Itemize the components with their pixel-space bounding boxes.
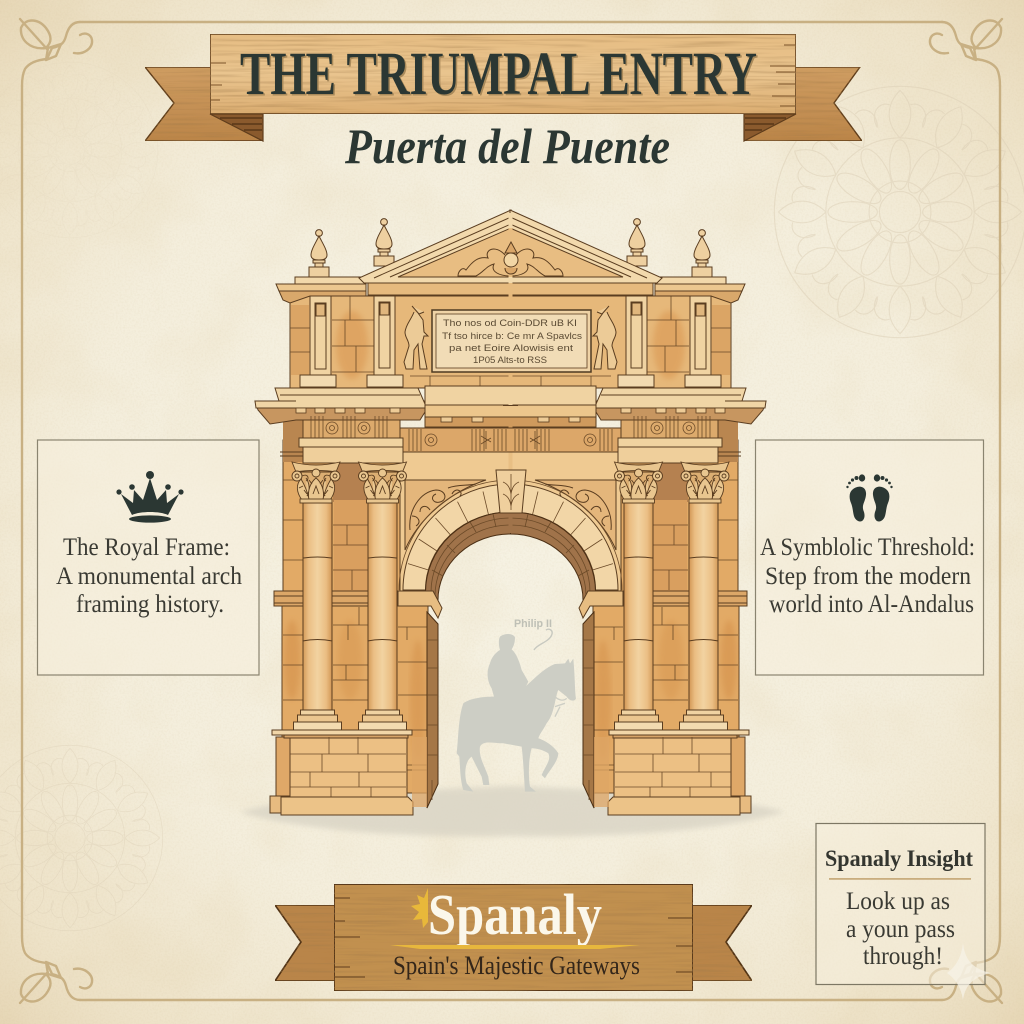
column two bbox=[358, 503, 406, 730]
finial inner bbox=[374, 219, 394, 266]
panel: symbolic threshold bbox=[756, 440, 984, 675]
icon: crown bbox=[116, 471, 184, 523]
insight text: a youn pass bbox=[846, 916, 955, 943]
text block: world into Al-Andalus bbox=[769, 591, 974, 618]
title shadow: THE TRIUMPAL ENTRY bbox=[242, 42, 758, 110]
attic wall bbox=[290, 296, 511, 388]
insight text: through! bbox=[863, 943, 943, 970]
voussoir ring bbox=[403, 484, 510, 590]
icon: sun bbox=[411, 888, 428, 928]
capital one bbox=[292, 462, 340, 503]
name label: Philip II bbox=[514, 618, 552, 630]
left ribbon tail bbox=[145, 67, 263, 141]
watermark: mandala bottom left bbox=[0, 745, 163, 931]
watermark: mandala top left bbox=[0, 62, 158, 238]
mid band bbox=[274, 591, 404, 606]
title text: THE TRIUMPAL ENTRY bbox=[240, 41, 757, 108]
pediment rosette bbox=[504, 242, 518, 274]
capital two bbox=[358, 462, 406, 503]
wooden plank bbox=[334, 884, 693, 991]
insight divider bbox=[829, 878, 971, 880]
panel: spanaly insight bbox=[816, 824, 985, 984]
text block: framing history. bbox=[76, 591, 224, 618]
finial outer bbox=[309, 230, 329, 277]
ground shadow bbox=[240, 786, 785, 836]
triglyph row bbox=[311, 416, 387, 438]
upper left entablature bbox=[255, 388, 425, 463]
wooden plank bbox=[210, 34, 796, 114]
spandrel bbox=[400, 452, 511, 592]
pediment bbox=[359, 210, 511, 283]
plank cracks bbox=[211, 45, 795, 106]
inscription text: Tho nos od Coin-DDR uB KI bbox=[443, 318, 577, 329]
insight text: Look up as bbox=[846, 888, 950, 915]
inscription text: 1P05 Alts-to RSS bbox=[473, 355, 547, 366]
text block: A monumental arch bbox=[56, 563, 242, 590]
rider silhouette: Philip II bbox=[457, 618, 576, 792]
left half of arch bbox=[255, 210, 511, 815]
lower wall bbox=[283, 440, 403, 592]
pier reveal bbox=[427, 612, 438, 808]
text block bbox=[760, 534, 975, 618]
right ribbon tail bbox=[744, 67, 862, 141]
title banner bbox=[145, 34, 862, 141]
text block bbox=[56, 534, 242, 618]
intrados band bbox=[426, 512, 510, 612]
panel: the royal frame bbox=[38, 440, 259, 675]
sparkle mark bbox=[947, 943, 990, 1000]
upper cornice bbox=[276, 277, 511, 303]
subtitle: Puerta del Puente bbox=[344, 118, 670, 174]
main cornice block bbox=[400, 386, 511, 474]
inscription text: Tf tso hirce b: Ce mr A Spavlcs bbox=[442, 331, 582, 342]
tagline: Spain's Majestic Gateways bbox=[393, 951, 640, 980]
logo text: Spanaly bbox=[428, 882, 602, 947]
text block: The Royal Frame: bbox=[63, 534, 230, 561]
right ribbon tail bbox=[688, 905, 752, 981]
dentils bbox=[296, 408, 483, 422]
right half of arch bbox=[510, 210, 766, 815]
inscription text: pa net Eoire Alowisis ent bbox=[449, 343, 573, 354]
frieze ornaments bbox=[409, 429, 506, 451]
spandrel scrollwork bbox=[405, 480, 486, 550]
inscription plaque bbox=[432, 310, 591, 372]
pedestal bbox=[270, 730, 413, 815]
centre seam cover bbox=[503, 213, 518, 533]
horse bbox=[457, 659, 576, 792]
insight text bbox=[846, 888, 955, 970]
gold rule bbox=[390, 945, 640, 949]
icon: footprints bbox=[846, 474, 893, 522]
label curl bbox=[534, 629, 552, 650]
footer banner bbox=[275, 882, 752, 991]
impost bbox=[398, 591, 442, 618]
attic pilasters bbox=[300, 296, 403, 387]
keystone bbox=[496, 470, 526, 513]
inscription text bbox=[442, 318, 582, 366]
bridle bbox=[555, 697, 567, 717]
relief figure bbox=[404, 306, 428, 369]
triumphal arch illustration bbox=[255, 210, 766, 815]
plank cracks bbox=[335, 898, 692, 977]
insight heading: Spanaly Insight bbox=[825, 846, 973, 871]
column one bbox=[294, 503, 342, 730]
watermark: mandala top right bbox=[774, 86, 1024, 338]
text block: A Symblolic Threshold: bbox=[760, 534, 975, 561]
rider bbox=[488, 634, 528, 700]
left ribbon tail bbox=[275, 905, 340, 981]
text block: Step from the modern bbox=[765, 563, 971, 590]
